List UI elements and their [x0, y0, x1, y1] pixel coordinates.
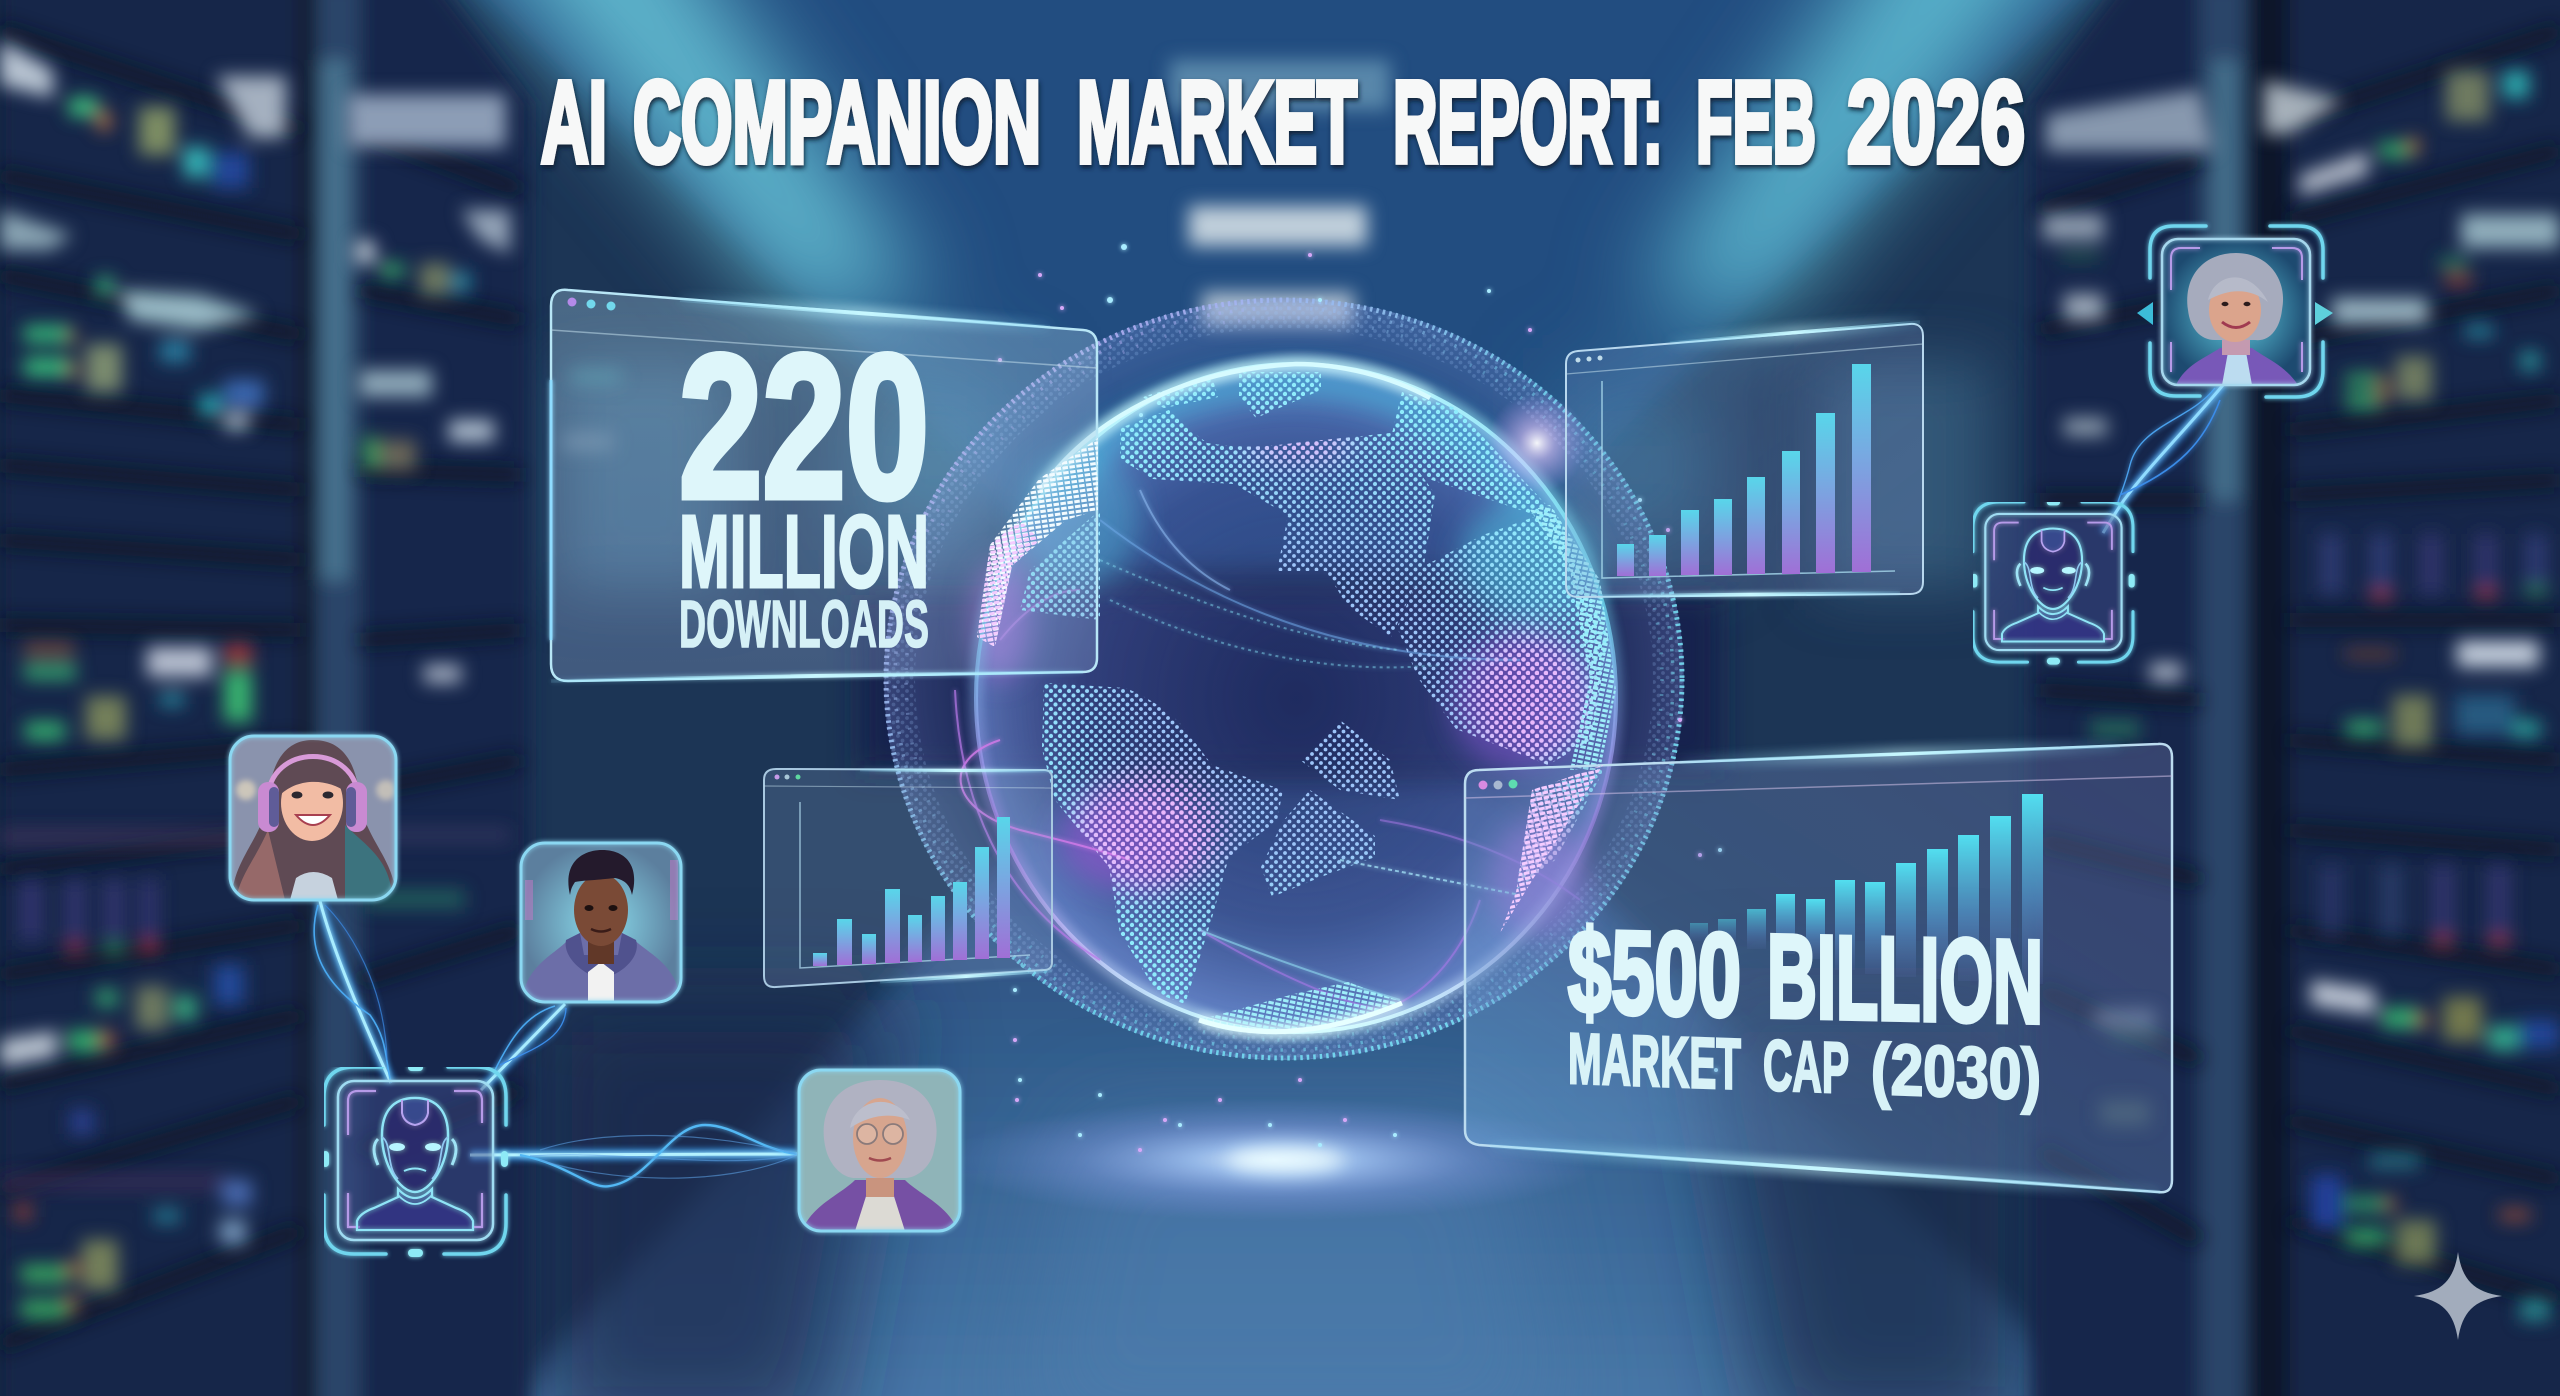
continents: [1020, 372, 1608, 1004]
stat label: market cap 2030: [1568, 1019, 2041, 1116]
lens flare: [1487, 393, 1587, 493]
polar dotted caps: [1199, 505, 1616, 1033]
north rim bright arc: [1040, 364, 1430, 490]
title: [541, 57, 2025, 187]
avatar: smiling woman in scan frame: [2137, 226, 2333, 397]
stat value: $500 billion: $500: [1568, 906, 1741, 1042]
title: MARKET: [1077, 57, 1357, 187]
icon: sparkle watermark: [2414, 1252, 2502, 1340]
title: FEB: [1696, 57, 1816, 187]
avatar: older woman with glasses: [799, 1070, 960, 1231]
connection: top woman to robot: [2103, 385, 2223, 533]
avatar: teen girl with headphones: [230, 736, 396, 900]
stat label: market cap 2030: MARKET: [1568, 1019, 1741, 1105]
connection: boy to robot: [481, 1004, 566, 1090]
holographic dotted globe: [884, 244, 1722, 1152]
floor light glow: [945, 1098, 1605, 1222]
title: REPORT:: [1393, 57, 1663, 187]
south pole bright arc: [1199, 1003, 1402, 1032]
outer shell: [884, 298, 1684, 1060]
panel: top right bar chart: [1566, 322, 1923, 597]
stat number: 220: 220: [679, 313, 929, 541]
connection: girl to robot: [314, 901, 391, 1083]
bars: [813, 817, 1010, 966]
title: AI: [541, 57, 607, 187]
inner sphere: [970, 364, 1616, 1032]
sparkle particles: [998, 244, 1722, 1152]
stat label: million: MILLION: [679, 494, 929, 609]
window dots: [568, 298, 616, 310]
title: 2026: [1847, 57, 2025, 187]
ceiling light panels: [1170, 60, 1390, 326]
panel: lower left bar chart: [764, 769, 1052, 987]
bars: [1617, 364, 1871, 576]
stat label: market cap 2030: (2030): [1871, 1030, 2041, 1116]
stat value: $500 billion: BILLION: [1767, 911, 2043, 1049]
orbit lines: [955, 490, 1580, 1010]
stat label: market cap 2030: CAP: [1763, 1026, 1849, 1109]
connection: robot to older woman: [470, 1125, 797, 1186]
panel: $500 billion market cap: [1465, 744, 2172, 1192]
stat label: downloads: DOWNLOADS: [679, 587, 929, 662]
icon: robot avatar frame, lower left: [322, 1064, 508, 1257]
stat value: $500 billion: [1568, 906, 2043, 1049]
icon: robot avatar frame, upper right: [1971, 499, 2135, 665]
avatar: young man in hoodie: [521, 843, 681, 1002]
bars: [1690, 794, 2043, 984]
globe crescents seen through the panels: [977, 438, 1603, 933]
title: COMPANION: [633, 57, 1041, 187]
panel: 220 million downloads: [551, 290, 1097, 681]
